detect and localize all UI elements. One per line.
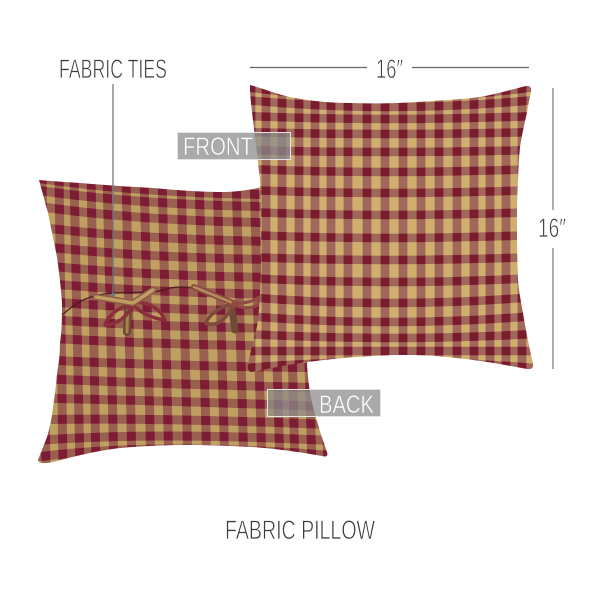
back pillow fabric — [38, 180, 328, 464]
leader line: fabric ties — [111, 84, 115, 297]
label: front: FRONT — [183, 133, 253, 161]
back pillow — [38, 180, 328, 464]
label: back — [268, 390, 380, 419]
caption: FABRIC PILLOW — [225, 515, 375, 545]
front pillow — [240, 80, 540, 380]
tie opening seam — [62, 287, 193, 315]
icon: left fabric bow — [96, 290, 165, 332]
label: fabric ties: FABRIC TIES — [59, 54, 167, 84]
label: back: BACK — [319, 391, 374, 419]
width dimension: 16″ — [376, 54, 403, 84]
height dimension: 16″ — [538, 213, 566, 243]
icon: right fabric bow — [194, 287, 259, 330]
